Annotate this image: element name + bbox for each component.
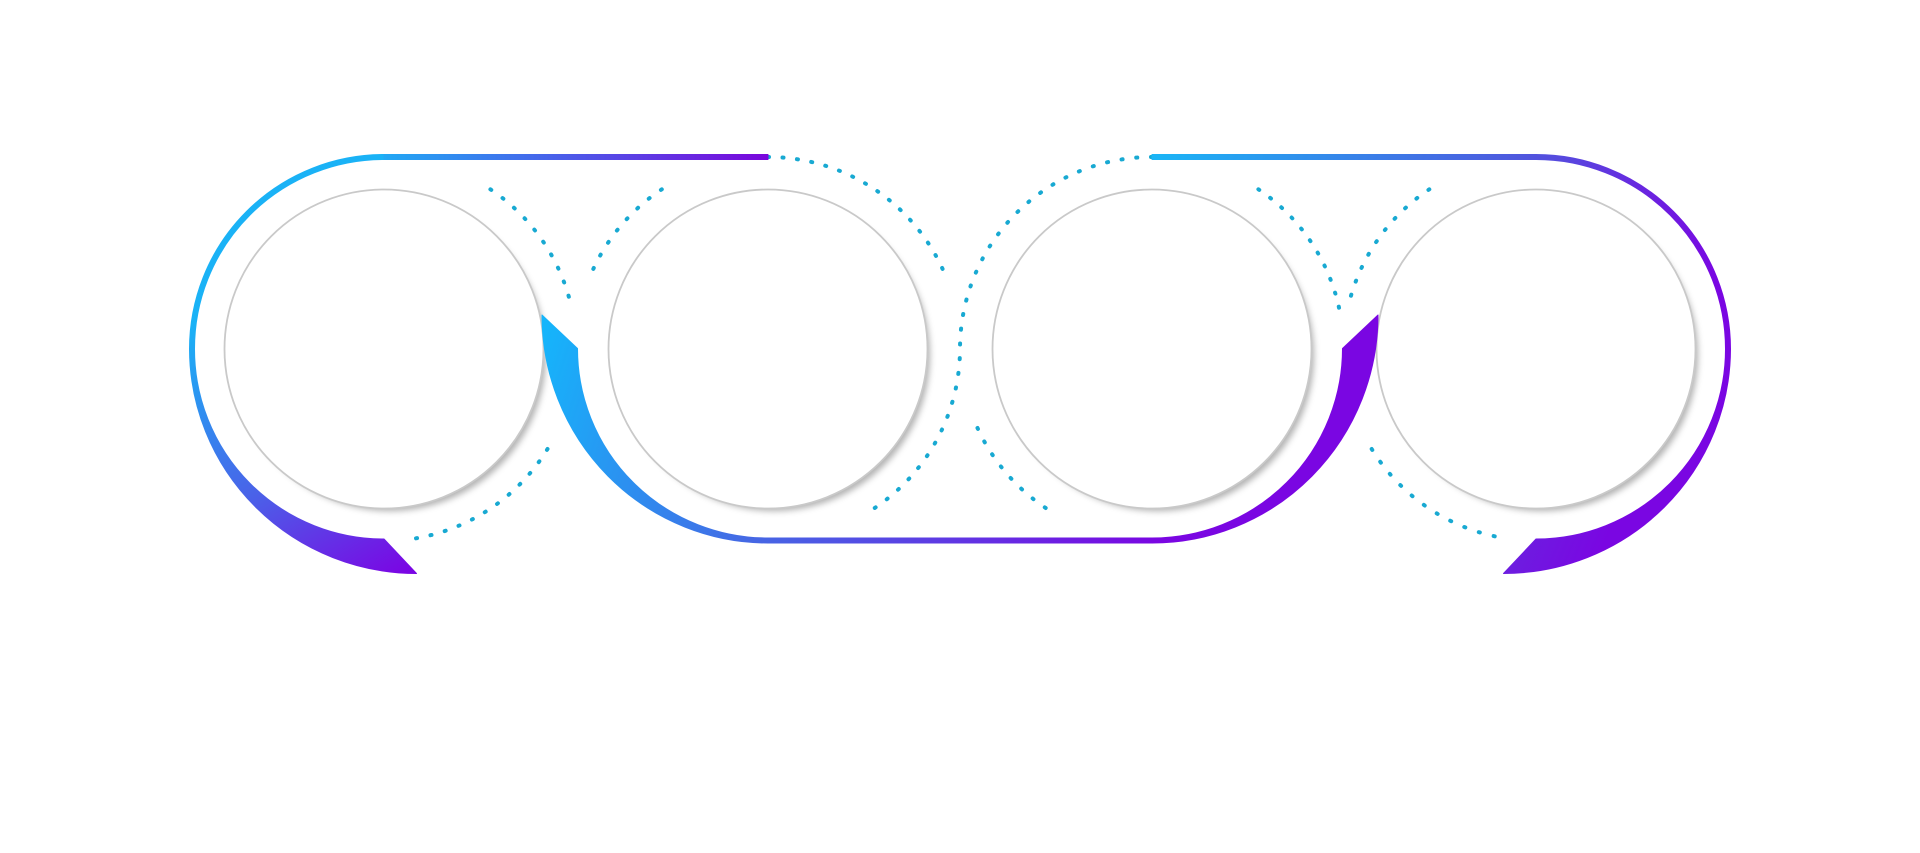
circle 4 <box>1376 190 1698 511</box>
dotted arc: bottom left of circle 4 <box>1372 449 1495 536</box>
dotted arc: bottom left of circle 3 <box>978 428 1046 508</box>
ribbon 1: left arc with arrow tail <box>190 154 416 574</box>
circle 1 <box>224 190 546 511</box>
circle 2 <box>608 190 930 511</box>
dotted arc: bottom right of circle 1 <box>416 449 548 538</box>
ribbon 1: top line <box>384 154 768 160</box>
ribbon 2: bottom connector with two arrow tails <box>542 315 1378 543</box>
dotted arc: top right of circle 2 <box>768 157 943 269</box>
ribbon 3: top line and right arc with arrow tail <box>1152 154 1730 574</box>
dotted arc: top right of circle 3 <box>1258 189 1339 308</box>
circle 3 <box>992 190 1314 511</box>
dotted arc: top right of circle 1 <box>490 189 569 297</box>
dotted arc: top left of circle 4 <box>1351 189 1429 296</box>
dotted arc: S curve between circle 3 and circle 2 <box>875 157 1152 508</box>
dotted arc: top left of circle 2 <box>593 189 662 269</box>
